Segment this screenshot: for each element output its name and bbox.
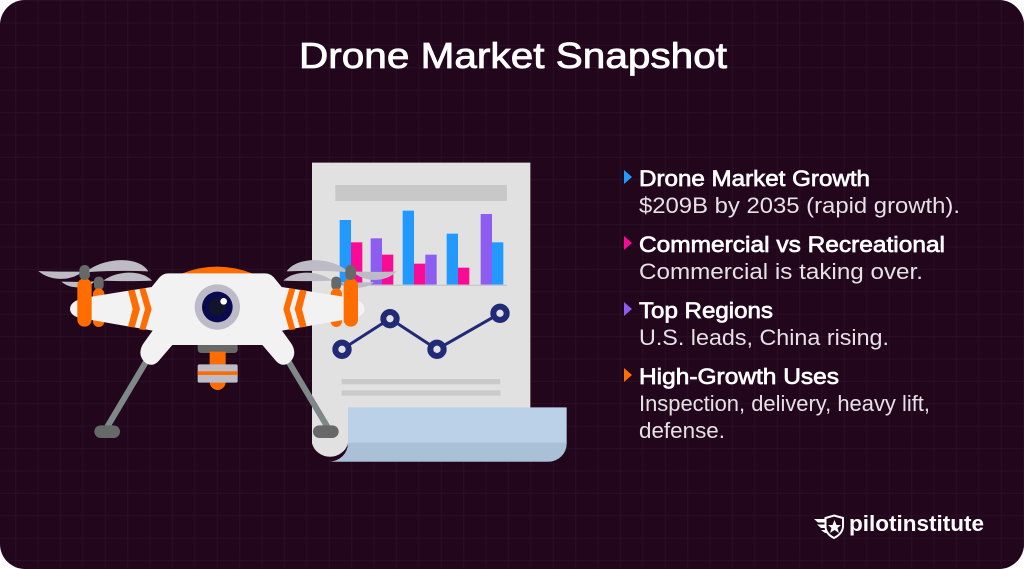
- item: top regions: Top Regions: [639, 298, 773, 323]
- logo: pilot institute: [814, 511, 984, 538]
- logo wordmark: pilotinstitute: [849, 511, 984, 536]
- landing legs: [94, 361, 339, 438]
- item: high-growth uses: Inspection, delivery, heavy lift,: [639, 391, 930, 416]
- icon: winged shield: [814, 516, 843, 538]
- item: high-growth uses: [624, 364, 930, 443]
- illustration: report document: [312, 163, 567, 462]
- item: drone market growth: Drone Market Growth: [639, 166, 870, 191]
- rear propellers: [61, 273, 374, 288]
- item: high-growth uses: High-Growth Uses: [639, 364, 839, 389]
- item: commercial vs recreational: Commercial is taking over.: [639, 259, 923, 284]
- arm chevrons: [128, 288, 307, 330]
- item: drone market growth: $209B by 2035 (rapid growth).: [639, 193, 960, 218]
- top dome: [181, 267, 254, 274]
- front propellers: [38, 260, 397, 280]
- illustration: drone: [38, 260, 397, 438]
- item: commercial vs recreational: [624, 232, 945, 284]
- title: Drone Market Snapshot: [299, 35, 727, 76]
- front motors: [77, 265, 358, 327]
- gimbal: [198, 342, 238, 390]
- item: commercial vs recreational: Commercial vs Recreational: [639, 232, 945, 257]
- camera lens: [195, 284, 240, 330]
- item: top regions: U.S. leads, China rising.: [639, 325, 889, 350]
- document text lines: [342, 379, 500, 396]
- document sheet: [312, 163, 530, 457]
- item: drone market growth: [624, 166, 960, 218]
- document heading bar: [335, 185, 507, 201]
- item: high-growth uses: defense.: [639, 418, 725, 443]
- rear motors: [93, 277, 342, 327]
- bar chart: [335, 211, 507, 286]
- drone body and arms: [70, 273, 365, 365]
- bullet list: [624, 166, 960, 443]
- item: top regions: [624, 298, 889, 350]
- line chart: [335, 307, 507, 356]
- scroll curl: [329, 407, 567, 462]
